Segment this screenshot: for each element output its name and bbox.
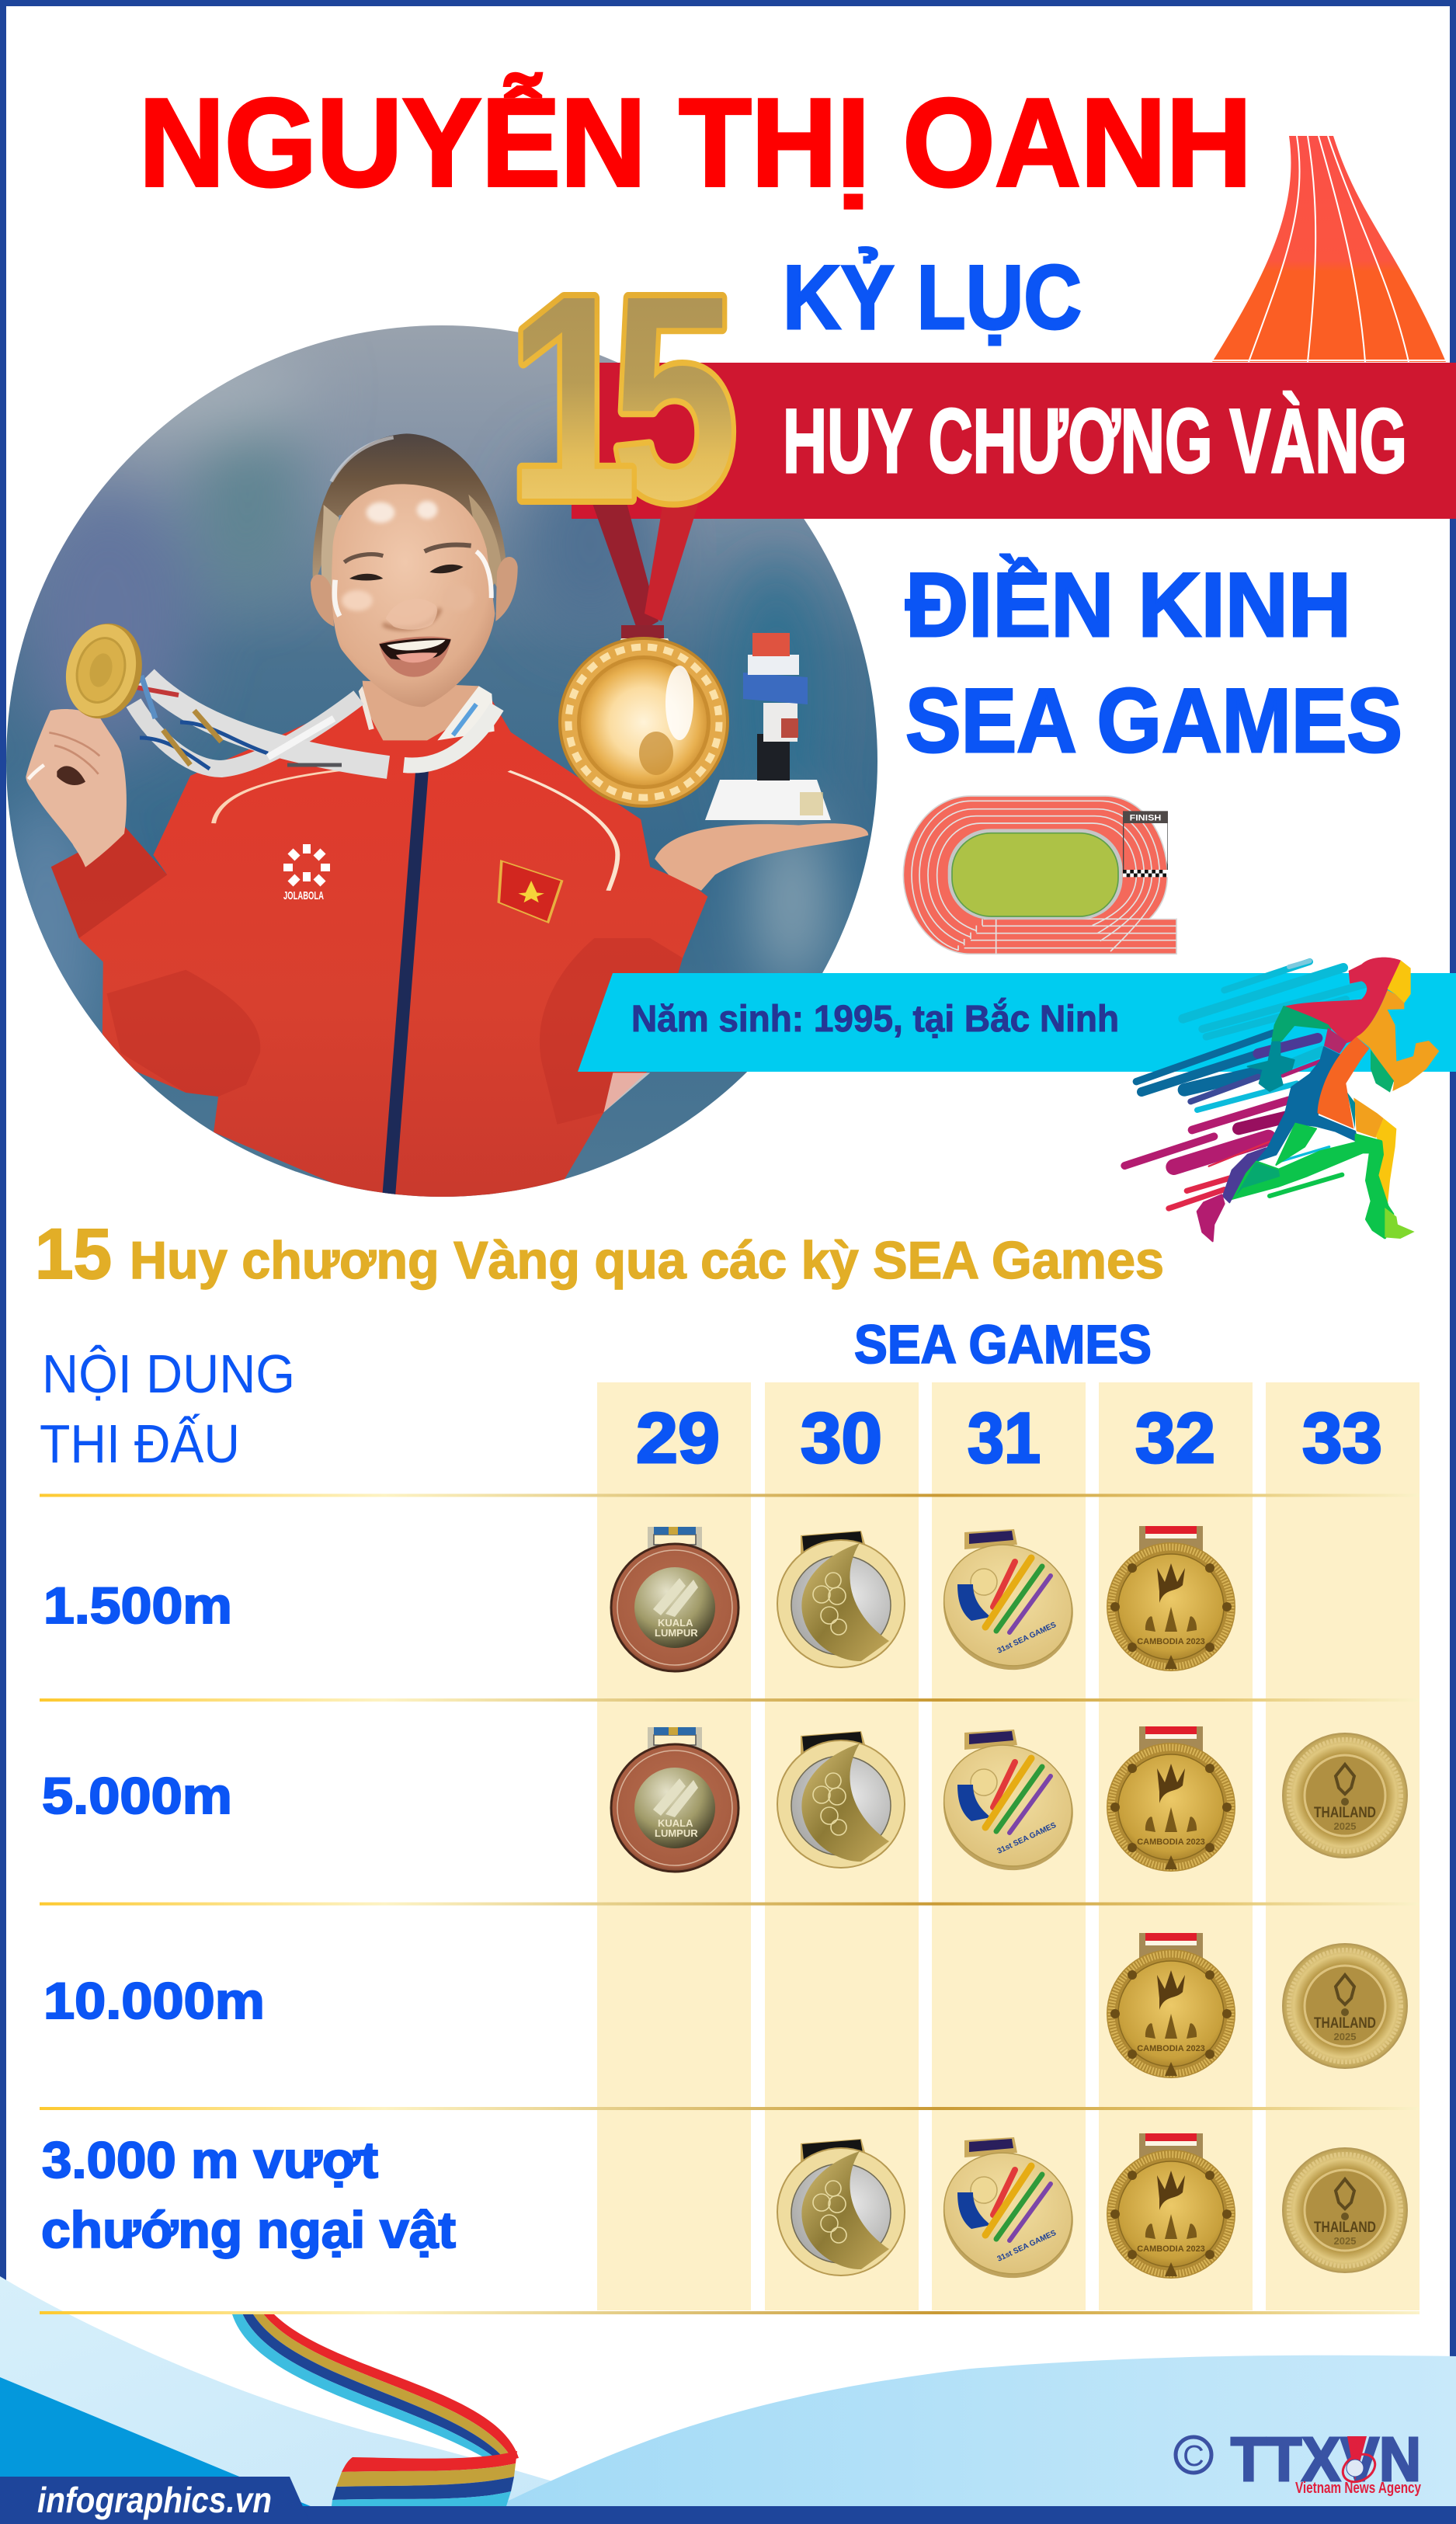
medal ribbon around neck <box>134 676 388 769</box>
right hand <box>655 823 868 891</box>
heading: ĐIỀN KINH: ĐIỀN KINH <box>905 554 1351 655</box>
row labels: 5.000m <box>42 1767 232 1824</box>
row labels: 3.000 m vượt <box>42 2131 378 2189</box>
row labels: chướng ngại vật <box>41 2201 456 2258</box>
jacket <box>51 701 707 1204</box>
icon: colorful runner <box>1124 958 1439 1241</box>
medals: row 5000m: LUMPUR <box>655 1827 698 1839</box>
panel: athlete photo circle <box>0 318 885 1204</box>
finish label: FINISH <box>1130 814 1161 823</box>
photo background blur <box>0 342 827 1072</box>
section heading: 15 <box>35 1215 112 1294</box>
medals: row 5000m <box>611 1723 1407 1893</box>
medals: row 5000m: 31st SEA GAMES <box>996 1821 1058 1856</box>
medals: row 1500m: KUALA <box>658 1617 693 1629</box>
edition numbers <box>636 1399 1382 1478</box>
medals: row 3000m steeplechase <box>777 2130 1407 2300</box>
trophy <box>705 633 831 820</box>
logo TTXVN: Vietnam News Agency <box>1295 2480 1422 2497</box>
column label: content: THI ĐẤU <box>40 1413 240 1474</box>
medals: row 5000m: 2025 <box>1334 1820 1356 1832</box>
brows <box>344 555 383 562</box>
neck and head <box>311 433 518 740</box>
mouth <box>379 637 451 677</box>
logo TTXVN: TTXVN <box>1231 2425 1421 2494</box>
medals: row 1500m <box>611 1522 1235 1692</box>
cyan banner <box>578 973 1456 1072</box>
SEA GAMES label: SEA GAMES <box>854 1314 1152 1375</box>
copyright mark: C <box>1183 2440 1204 2473</box>
row labels <box>41 1577 456 2258</box>
medals: row 5000m: THAILAND <box>1314 1805 1376 1821</box>
hair <box>313 433 506 588</box>
brand logo <box>283 844 330 884</box>
medals: row 5000m: CAMBODIA 2023 <box>1137 1837 1205 1847</box>
bottom bar <box>0 2506 1456 2524</box>
medals: row 10000m: THAILAND <box>1314 2015 1376 2032</box>
ears <box>311 575 334 627</box>
medal V ribbon <box>590 497 700 643</box>
medals: row 3000m steeplechase: CAMBODIA 2023 <box>1137 2244 1205 2254</box>
face <box>332 484 495 707</box>
table columns <box>597 1382 1420 2310</box>
row labels: 10.000m <box>43 1972 265 2029</box>
athlete <box>26 433 868 1204</box>
icon: running track top right <box>1212 136 1446 362</box>
website text: infographics.vn <box>37 2480 272 2520</box>
medals: row 1500m: CAMBODIA 2023 <box>1137 1637 1205 1646</box>
heading: KỶ LỤC: KỶ LỤC <box>783 246 1082 348</box>
brand text: JOLABOLA <box>283 889 324 902</box>
edition numbers: 29 <box>636 1399 720 1478</box>
ribbon <box>232 2314 519 2506</box>
edition numbers: 32 <box>1135 1399 1215 1478</box>
footer waves <box>0 2276 1456 2512</box>
edition numbers: 33 <box>1302 1399 1382 1478</box>
flag patch <box>499 861 562 923</box>
medals: row 5000m: KUALA <box>658 1817 693 1829</box>
column label: content: NỘI DUNG <box>42 1344 295 1404</box>
left hand <box>26 709 127 867</box>
medals: row 1500m: 31st SEA GAMES <box>996 1621 1058 1656</box>
medals: row 3000m steeplechase: 31st SEA GAMES <box>996 2229 1058 2264</box>
big gold number 15: 1 <box>507 236 638 561</box>
heading: SEA GAMES: SEA GAMES <box>905 669 1402 771</box>
big gold number 15: 5 <box>611 236 738 561</box>
nose <box>386 605 437 630</box>
birth info: Năm sinh: 1995, tại Bắc Ninh <box>631 997 1119 1040</box>
red banner <box>572 363 1456 519</box>
section heading: Huy chương Vàng qua các kỳ SEA Games <box>130 1231 1164 1290</box>
medals: row 10000m: CAMBODIA 2023 <box>1137 2044 1205 2053</box>
gold medal <box>558 637 729 808</box>
medals: row 1500m: LUMPUR <box>655 1627 698 1639</box>
medals: row 10000m: 2025 <box>1334 2031 1356 2042</box>
medals: row 3000m steeplechase: THAILAND <box>1314 2220 1376 2236</box>
column label: content <box>40 1344 295 1474</box>
row labels: 1.500m <box>43 1577 232 1634</box>
infographics.vn tag <box>0 2477 311 2524</box>
collar <box>359 686 374 730</box>
medals: row 3000m steeplechase: 2025 <box>1334 2235 1356 2247</box>
copyright mark <box>1176 2437 1211 2473</box>
held medal <box>65 623 142 719</box>
eyes <box>349 574 383 580</box>
edition numbers: 30 <box>801 1399 882 1478</box>
finish sign <box>1123 811 1168 823</box>
edition numbers: 31 <box>968 1399 1041 1478</box>
section heading <box>35 1215 1164 1294</box>
title: NGUYỄN THỊ OANH <box>139 73 1252 213</box>
medals: row 10000m <box>1107 1933 1407 2078</box>
icon: stadium track <box>903 796 1176 954</box>
right strap shading <box>404 707 497 766</box>
